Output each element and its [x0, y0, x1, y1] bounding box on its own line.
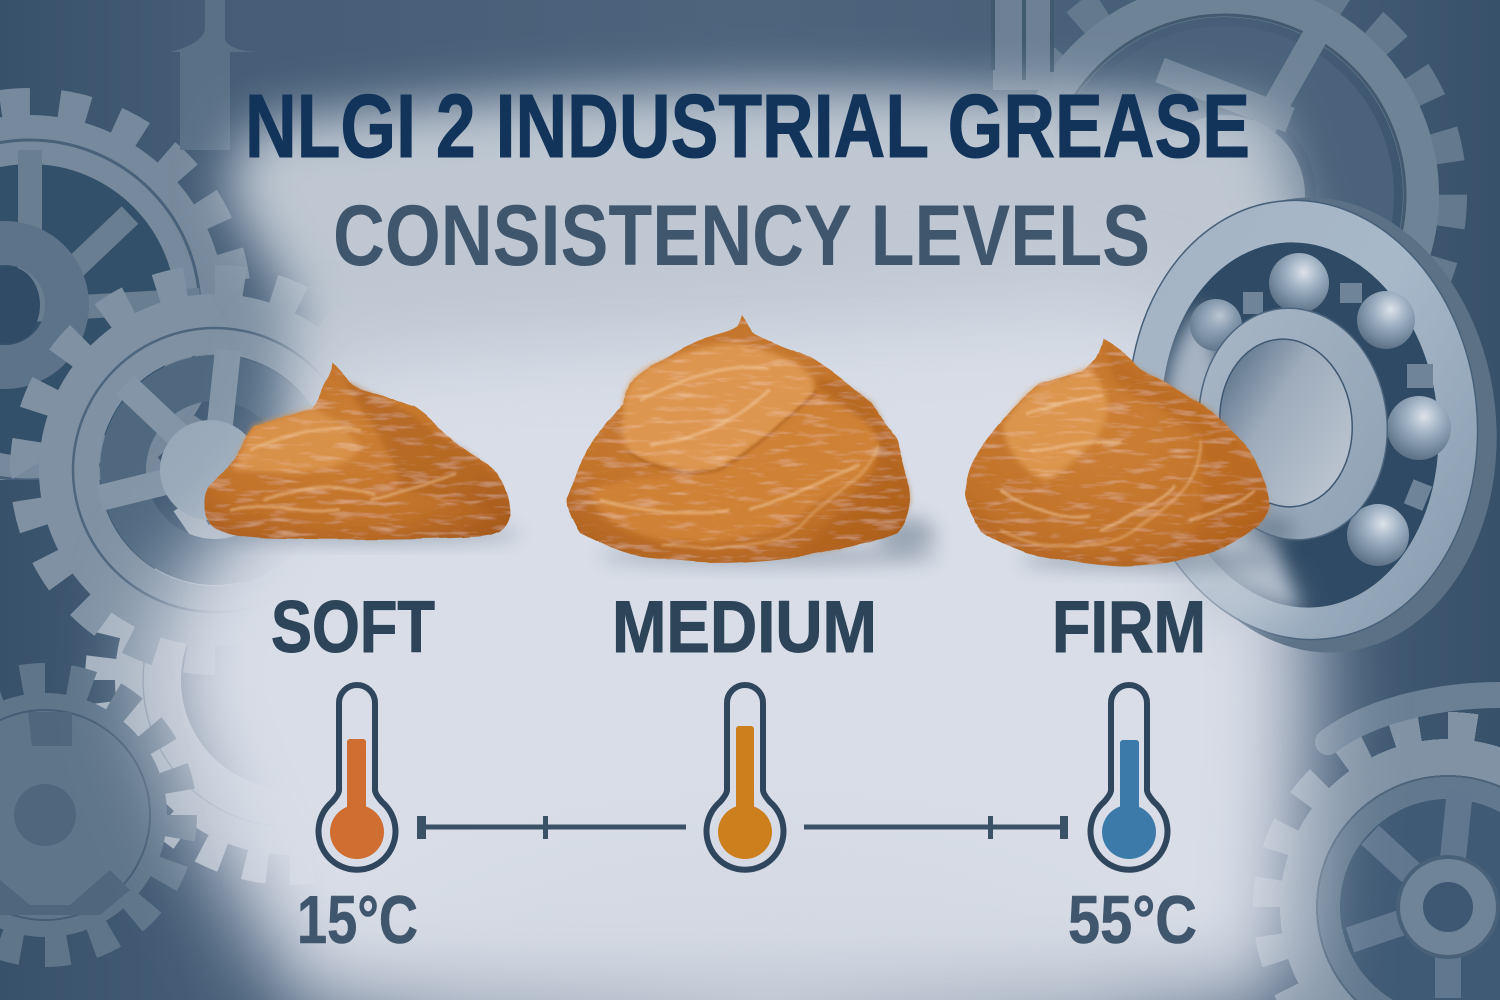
bearing: bore: [1212, 333, 1360, 513]
label: medium: MEDIUM: [612, 587, 877, 668]
thermometer: soft: [318, 685, 396, 870]
light panel: bottom fill: [260, 780, 1280, 1000]
title: [245, 77, 1250, 284]
bearing: inner ring: [1187, 299, 1399, 549]
subtitle: CONSISTENCY LEVELS: [333, 188, 1150, 284]
connector: soft to medium: [417, 816, 686, 839]
shadow: firm: [1020, 551, 1280, 569]
gear: small hub left: [0, 221, 89, 389]
temperature: 15°C: 15°C: [297, 882, 418, 958]
grease blob: soft: [204, 363, 510, 539]
label: soft: SOFT: [271, 587, 435, 668]
temperature: 55°C: 55°C: [1068, 882, 1197, 958]
vertical bars: top centre right: [991, 0, 1054, 90]
title: NLGI 2 INDUSTRIAL GREASE: [245, 77, 1250, 177]
thermometer: firm: [1090, 685, 1168, 870]
thermometer: medium: [706, 685, 783, 870]
ball bearing: [1107, 180, 1500, 670]
gear teeth: bottom right: [1253, 712, 1478, 1000]
label: firm: FIRM: [1052, 587, 1206, 668]
bracket: top left: [170, 0, 254, 150]
gear: upper left: [0, 88, 250, 480]
bearing: balls: [1190, 253, 1451, 566]
grease blob: medium: [567, 315, 910, 563]
grease blob: firm: [964, 338, 1270, 567]
bearing: outer ring: [1107, 183, 1499, 657]
gear: top right: [1035, 0, 1467, 282]
gear: bottom left: [0, 663, 197, 967]
gear rings: bottom right: [1250, 680, 1500, 1000]
bearing: back rim: [1121, 180, 1500, 670]
shadow: medium: [600, 547, 940, 565]
gear: middle left: [10, 268, 316, 674]
connector: medium to firm: [804, 816, 1068, 839]
shadow: soft: [220, 526, 520, 542]
gear: lower left large faint: [85, 508, 290, 884]
gear: bottom right: [1253, 682, 1500, 1000]
bearing: raceway: [1144, 229, 1456, 621]
bearing: cage segments: [1243, 283, 1433, 511]
